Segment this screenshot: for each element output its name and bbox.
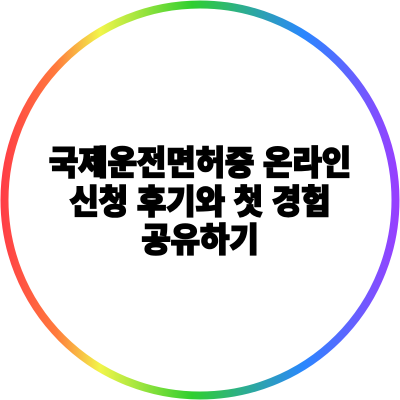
title [49,144,351,259]
title: 국제운전면허증 온라인 [49,144,351,182]
title: 신청 후기와 첫 경험 [69,183,331,221]
title: 공유하기 [141,221,259,259]
